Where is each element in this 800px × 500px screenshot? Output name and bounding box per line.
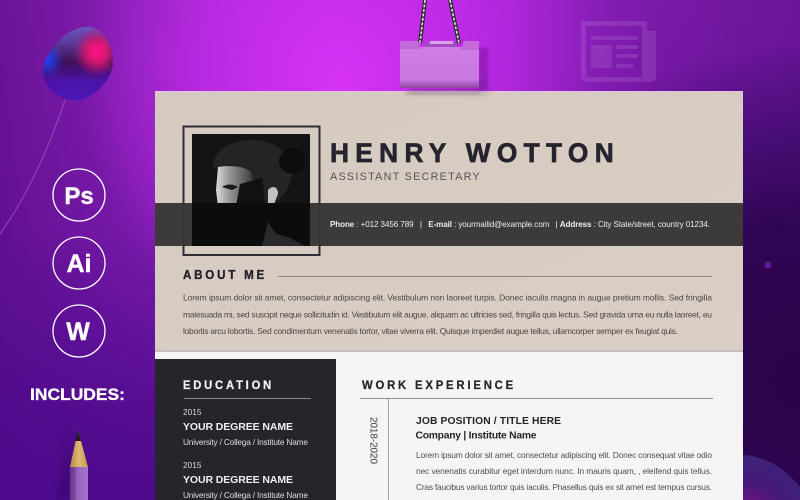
- panel: education sidebar: [155, 359, 336, 500]
- balloon string: [0, 100, 65, 234]
- icon: Illustrator badge: [53, 237, 105, 289]
- contact band: [155, 203, 743, 246]
- panel: white lower page: [155, 350, 743, 500]
- section: work experience: nec venenatis curabitur eget interdum nunc. In mauris quam, , eleifend quis tellus.: [416, 466, 712, 476]
- panel: education sidebar: EDUCATION: [183, 378, 274, 392]
- section: work experience: WORK EXPERIENCE: [362, 378, 516, 392]
- panel: education sidebar: YOUR DEGREE NAME: [183, 474, 293, 486]
- panel: education sidebar: 2015: [183, 407, 202, 417]
- section: work experience: [360, 378, 713, 500]
- resume page: [155, 91, 743, 500]
- balloon: [43, 27, 113, 100]
- section: about me: [183, 268, 712, 336]
- panel: education sidebar: University / Collega / Institute Name: [183, 490, 308, 500]
- section: work experience: Company | Institute Name: [416, 430, 537, 442]
- icon: Word badge: [53, 305, 105, 357]
- icon: Word badge: W: [66, 318, 90, 346]
- icon: Illustrator badge: Ai: [66, 250, 92, 278]
- section: about me: ABOUT ME: [183, 268, 267, 282]
- panel: education sidebar: YOUR DEGREE NAME: [183, 421, 293, 433]
- portrait photo: [192, 134, 310, 246]
- decorative orb: [743, 455, 800, 500]
- section: about me: lobortis arcu lobortis. Sed condimentum venenatis tortor, vitae viverra elit. Quisque imperdiet augue tellus, ullamcorper semper ex feugiat quis.: [183, 326, 678, 336]
- job title: ASSISTANT SECRETARY: [330, 171, 481, 183]
- icon: pencil: [58, 425, 88, 500]
- section: about me: Lorem ipsum dolor sit amet, consectetur adipiscing elit. Vestibulum non laoreet turpis. Donec iaculis magna in augue pretium mollis. Sed fringilla: [183, 293, 712, 303]
- section: work experience: Lorem ipsum dolor sit amet, consectetur adipiscing elit. Donec consequat vitae odio: [416, 450, 712, 460]
- panel: beige header: [155, 91, 743, 350]
- name: HENRY WOTTON: [330, 138, 620, 168]
- section: work experience: 2018-2020: [368, 417, 378, 464]
- icon: Photoshop badge: [53, 169, 105, 221]
- panel: education sidebar: University / Collega / Institute Name: [183, 437, 308, 447]
- icon: newspaper watermark: [581, 21, 656, 82]
- binder clip: [400, 0, 488, 93]
- section: work experience: Cras faucibus varius tortor quis iaculis. Phasellus quis ex sit amet est tempus cursus.: [416, 482, 712, 492]
- section: work experience: JOB POSITION / TITLE HERE: [416, 416, 561, 427]
- section: about me: malesuada mi, sed suscipit neque sollicitudin id. Vestibulum elit augue, aliquam ac ultricies sed, fringilla quis lectus. Sed gravida urna eu nulla laoreet, eu: [183, 309, 712, 319]
- includes label: INCLUDES:: [30, 385, 125, 404]
- decorative dot: [764, 262, 772, 268]
- icon: Photoshop badge: Ps: [64, 183, 94, 210]
- panel: education sidebar: 2015: [183, 460, 202, 470]
- contact band: Phone : +012 3456 789 | E-mail : yourmailid@example.com | Address : City State/street, country 01234.: [330, 220, 710, 229]
- photo frame: [184, 126, 320, 255]
